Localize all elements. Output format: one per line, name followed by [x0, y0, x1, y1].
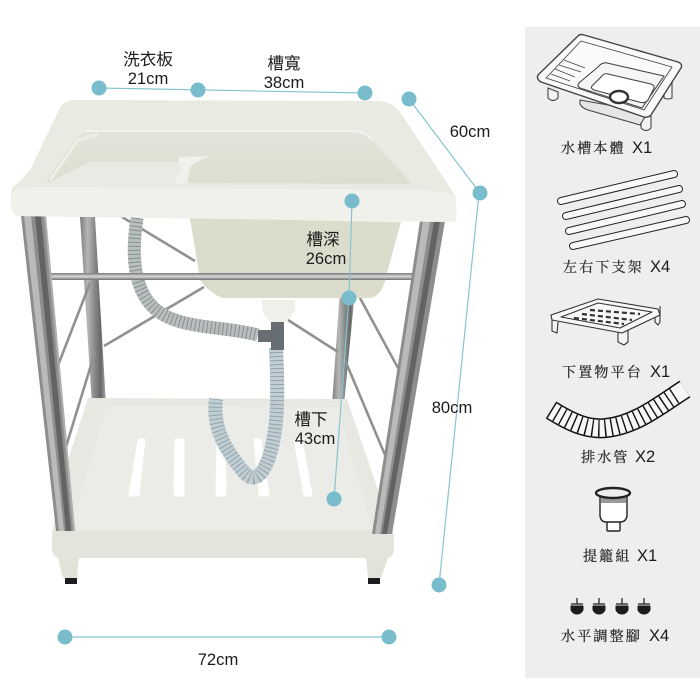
label: basin width: 槽寬 [267, 54, 301, 73]
label: basin depth: 槽深 [306, 230, 340, 249]
label: adjustable feet: 水平調整腳 [561, 630, 642, 645]
product photo: sink on stand [11, 100, 456, 584]
icon: support poles [561, 174, 686, 246]
front left leg [21, 216, 75, 531]
label: clearance under basin: 槽下 [294, 410, 328, 429]
label: sink body: X1 [632, 139, 652, 157]
lower shelf [52, 398, 394, 558]
label: lower platform: X1 [650, 363, 670, 381]
crossbar [47, 273, 417, 280]
label: basin depth: 26cm [306, 249, 346, 268]
icon: drain pipe [551, 389, 685, 428]
label: strainer basket: 提籠組 [583, 550, 632, 565]
label: washboard width: 21cm [128, 69, 168, 88]
icon: adjustable feet [571, 598, 650, 614]
back legs [80, 217, 355, 405]
label: depth front to back: 60cm [450, 122, 490, 141]
panel: accessories background [525, 27, 700, 678]
dimension dots [58, 80, 488, 644]
label: sink body: 水槽本體 [561, 142, 626, 157]
label: strainer basket: X1 [637, 547, 657, 565]
basin interior [46, 131, 412, 184]
front right leg [372, 221, 445, 534]
dimension lines [65, 88, 480, 637]
diagonal braces [57, 217, 398, 455]
label: support poles: X4 [650, 258, 670, 276]
label: drain pipe: X2 [635, 448, 655, 466]
icon: sink body [537, 34, 682, 130]
label: lower platform: 下置物平台 [562, 366, 643, 381]
sink basin rim [11, 100, 456, 222]
T connector [258, 322, 284, 350]
drain hose [134, 218, 277, 477]
drain outlet [262, 300, 295, 322]
label: washboard width: 洗衣板 [123, 50, 173, 69]
label: support poles: 左右下支架 [563, 261, 644, 276]
washboard [50, 162, 180, 184]
sink tub [190, 218, 401, 298]
label: clearance under basin: 43cm [295, 429, 335, 448]
shelf slots [130, 440, 311, 495]
label: drain pipe: 排水管 [581, 451, 630, 466]
label: total width: 72cm [198, 650, 238, 669]
label: adjustable feet: X4 [649, 627, 669, 645]
label: basin width: 38cm [264, 73, 304, 92]
feet [58, 558, 388, 584]
label: height: 80cm [432, 398, 472, 417]
icon: lower platform [551, 299, 660, 345]
icon: strainer basket [596, 488, 630, 531]
